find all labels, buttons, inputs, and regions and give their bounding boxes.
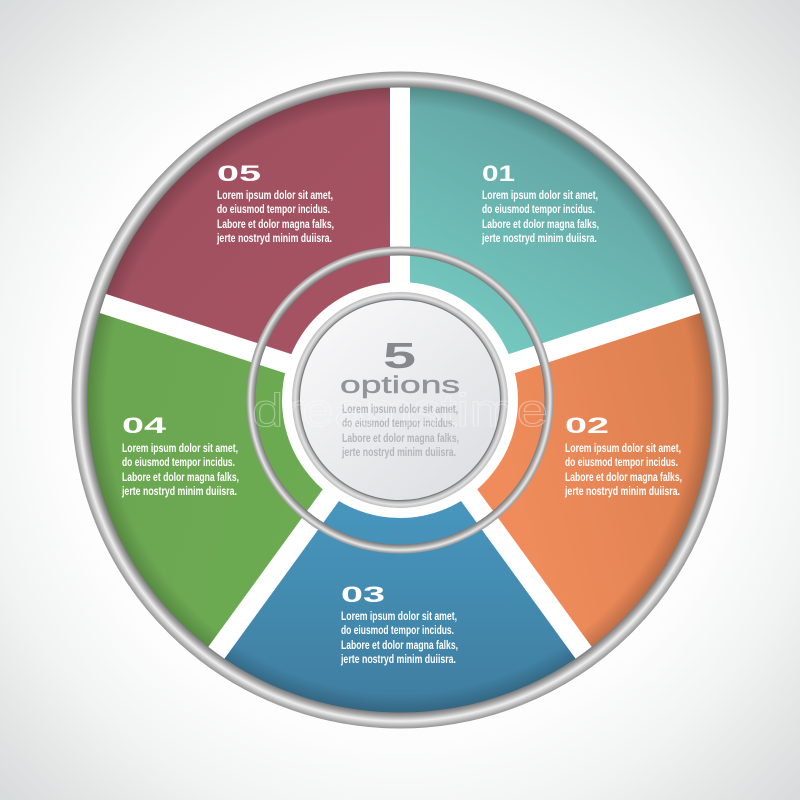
center text block: Labore et dolor magna falks,: [342, 433, 459, 445]
panel: segment 03 blue: [214, 400, 586, 716]
text block 01: Labore et dolor magna falks,: [482, 219, 599, 231]
rim shadow: [84, 84, 716, 716]
label 02: 02: [565, 413, 609, 438]
outer metal ring: [80, 80, 720, 720]
text block 02: [564, 443, 682, 498]
label 03: 03: [341, 582, 385, 607]
white separators: [96, 80, 704, 659]
panel: segment 02 orange: [400, 302, 716, 656]
center heading options: options: [340, 372, 460, 399]
text block 05: Labore et dolor magna falks,: [217, 219, 334, 231]
label 04: 04: [122, 413, 167, 438]
panel: segment 01 teal: [400, 84, 700, 400]
text block 03: [340, 611, 458, 666]
center text block: [341, 404, 459, 459]
text block 04: Lorem ipsum dolor sit amet,: [122, 443, 238, 455]
text block 01: Lorem ipsum dolor sit amet,: [482, 190, 598, 202]
text block 05: jerte nostryd minim duiisra.: [216, 233, 332, 245]
text block 02: jerte nostryd minim duiisra.: [564, 486, 680, 498]
label 01: 01: [482, 161, 515, 186]
center text block: Lorem ipsum dolor sit amet,: [342, 404, 458, 416]
label 05: [216, 161, 334, 245]
text block 05: do eiusmod tempor incidus.: [217, 204, 330, 216]
text block 04: Labore et dolor magna falks,: [122, 472, 239, 484]
text block 05: Lorem ipsum dolor sit amet,: [217, 190, 333, 202]
text block 02: do eiusmod tempor incidus.: [565, 457, 678, 469]
text block 04: jerte nostryd minim duiisra.: [121, 486, 237, 498]
text block 01: jerte nostryd minim duiisra.: [481, 233, 597, 245]
text block 01: [481, 190, 599, 245]
label 02: [564, 413, 682, 498]
label 01: [481, 161, 599, 245]
text block 03: do eiusmod tempor incidus.: [341, 625, 454, 637]
label 05: 05: [217, 161, 261, 186]
center number 5: 5: [383, 335, 416, 376]
center disc with ring: [292, 292, 508, 508]
panel: segment 04 green: [84, 302, 400, 656]
text block 04: [121, 443, 239, 498]
text block 02: Labore et dolor magna falks,: [565, 472, 682, 484]
text block 02: Lorem ipsum dolor sit amet,: [565, 443, 681, 455]
text block 03: Labore et dolor magna falks,: [341, 640, 458, 652]
text block 04: do eiusmod tempor incidus.: [122, 457, 235, 469]
panel: segment 05 maroon: [100, 84, 400, 400]
center text block: jerte nostryd minim duiisra.: [341, 447, 456, 459]
label 03: [340, 582, 458, 666]
label 04: [121, 413, 239, 498]
inner white annulus: [282, 282, 518, 518]
text block 05: [216, 190, 334, 245]
wheel base: [84, 84, 716, 716]
center text block: do eiusmod tempor incidus.: [342, 418, 455, 430]
text block 01: do eiusmod tempor incidus.: [482, 204, 595, 216]
text block 03: jerte nostryd minim duiisra.: [340, 654, 456, 666]
watermark: dreamstime: [252, 384, 548, 436]
text block 03: Lorem ipsum dolor sit amet,: [341, 611, 457, 623]
middle metal ring: [251, 251, 549, 549]
